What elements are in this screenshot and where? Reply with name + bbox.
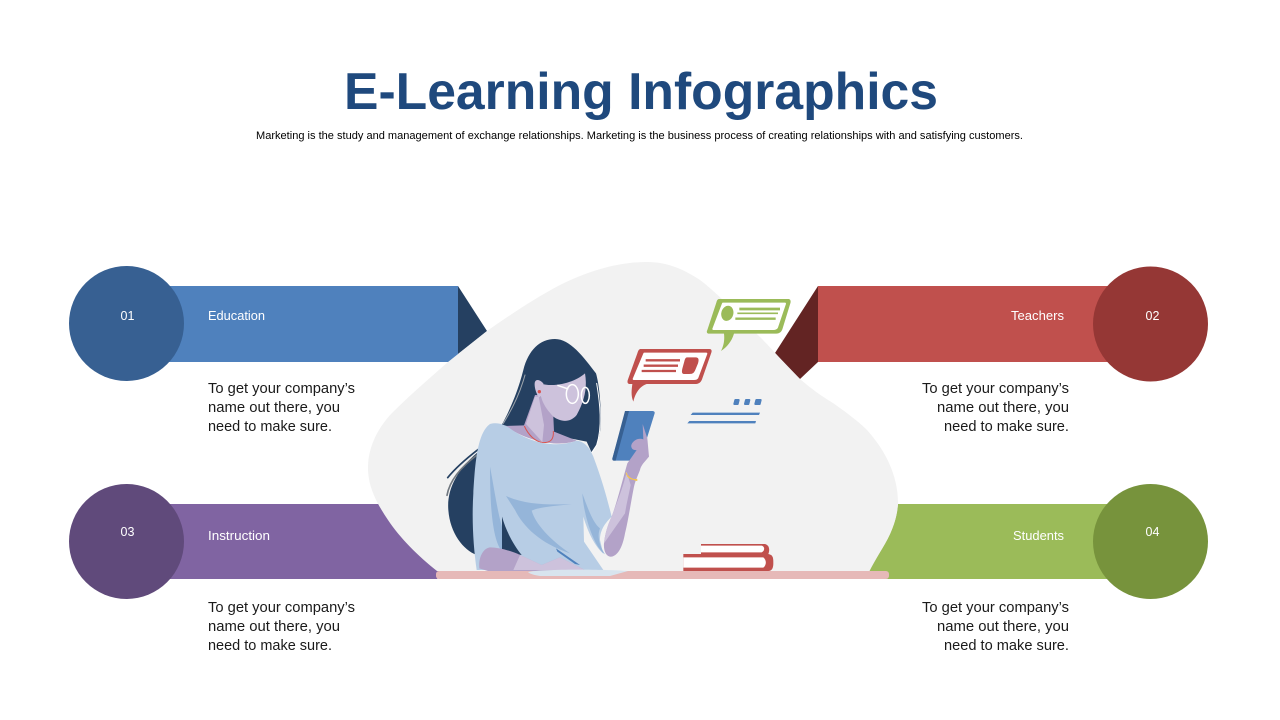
icon: red speech bubble: [627, 349, 712, 402]
text block: instruction: To get your company’s: [208, 599, 355, 616]
text block: students: name out there, you: [937, 618, 1069, 635]
text block: education: need to make sure.: [208, 418, 332, 435]
label: instruction: Instruction: [208, 529, 270, 543]
sweater: [473, 423, 612, 570]
hair main: [502, 339, 601, 453]
label: teachers: Teachers: [1011, 309, 1064, 323]
ear: [535, 380, 543, 397]
text block: education: [208, 380, 355, 435]
text block: instruction: need to make sure.: [208, 637, 332, 654]
illustration background blob: [368, 262, 898, 572]
hair back: [448, 453, 522, 555]
panel: 01 education banner: [160, 286, 487, 362]
badge 02: 02: [1146, 309, 1159, 323]
table: [436, 571, 889, 579]
icon: woman reading tablet: [447, 339, 655, 572]
face: [539, 373, 586, 421]
panel: 02 teachers banner: [775, 286, 1110, 379]
badge 03: 03: [121, 525, 134, 539]
label: students: Students: [1013, 529, 1064, 543]
text block: students: [922, 599, 1069, 654]
dark gap between arm and torso: [502, 517, 522, 555]
icon: books: [683, 544, 773, 571]
gap between sleeve and body: [583, 517, 627, 570]
sweater shadows: [490, 467, 605, 554]
badge 04: 04: [1146, 525, 1159, 539]
panel: 03 instruction banner: [160, 504, 450, 579]
bracelet: [626, 473, 637, 481]
icon: green speech bubble: [707, 299, 791, 351]
panel: 04 students banner: [869, 504, 1110, 579]
paper: [528, 570, 628, 576]
neck and chest: [505, 395, 577, 443]
neck highlight: [526, 397, 544, 442]
title: E-Learning Infographics: [344, 63, 938, 121]
badge 01: [69, 266, 184, 381]
badge 02: [1093, 266, 1208, 382]
necklace: [524, 426, 553, 443]
badge 04: [1093, 484, 1208, 599]
text block: education: To get your company’s: [208, 380, 355, 397]
hair highlights: [447, 375, 600, 495]
glasses: [557, 385, 589, 403]
text block: teachers: To get your company’s: [922, 380, 1069, 397]
badge 03: [69, 484, 184, 599]
text block: education: name out there, you: [208, 399, 340, 416]
lower arm: [479, 547, 585, 572]
forearm highlight: [604, 472, 631, 543]
text block: students: To get your company’s: [922, 599, 1069, 616]
earring: [538, 390, 541, 393]
label: education: Education: [208, 309, 265, 323]
badge 01: 01: [121, 309, 134, 323]
subtitle: Marketing is the study and management of exchange relationships. Marketing is the business process of creating relationships with and satisfying customers.: [256, 130, 1023, 142]
text block: teachers: name out there, you: [937, 399, 1069, 416]
pen: [556, 548, 580, 565]
text block: teachers: [922, 380, 1069, 435]
raised arm and hand: [604, 424, 649, 557]
tablet: [612, 411, 655, 461]
lower arm highlight: [513, 555, 585, 570]
icons: speech bubbles and books: [627, 299, 791, 571]
text block: instruction: name out there, you: [208, 618, 340, 635]
text block: instruction: [208, 599, 355, 654]
text block: students: need to make sure.: [944, 637, 1069, 654]
text block: teachers: need to make sure.: [944, 418, 1069, 435]
icon: typing message: [687, 400, 761, 423]
